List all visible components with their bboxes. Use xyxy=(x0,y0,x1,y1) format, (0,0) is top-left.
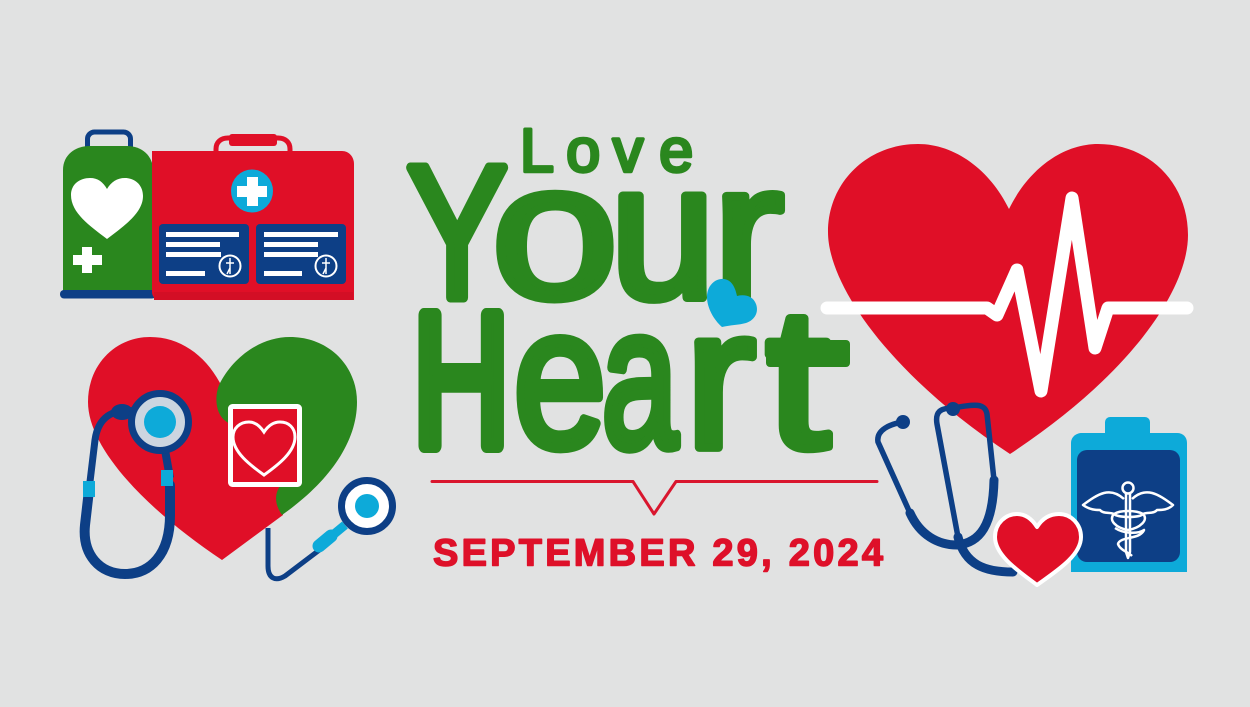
heading: Heart: r xyxy=(685,267,756,490)
heading: Heart: a xyxy=(602,266,678,490)
icon: large red heart xyxy=(828,144,1188,454)
panel: left info card xyxy=(159,224,249,284)
heading: Your xyxy=(407,123,784,339)
icon: heart monitor card xyxy=(230,406,300,484)
icon: green half of heart xyxy=(216,337,357,515)
heading: Love: Love xyxy=(520,116,693,184)
heading: Heart: e xyxy=(514,266,606,490)
icon: red case xyxy=(152,134,354,300)
pulse line xyxy=(827,198,1187,391)
icon: red half of heart xyxy=(88,337,283,560)
icon: two-colour heart with stethoscope xyxy=(83,337,392,579)
heading: Your: r xyxy=(713,125,784,339)
title xyxy=(407,116,850,490)
icon: small red heart xyxy=(995,514,1081,585)
icon: caduceus xyxy=(1083,482,1173,558)
date: SEPTEMBER 29, 2024 xyxy=(433,532,883,574)
icon: left stethoscope xyxy=(83,394,188,574)
heading: Your: o xyxy=(492,123,618,339)
heading: Your: u xyxy=(610,125,715,339)
heading: Heart xyxy=(413,266,850,490)
panel: right info card xyxy=(256,224,346,284)
icon: small blue heart xyxy=(707,279,757,327)
icon: green bag xyxy=(60,132,156,298)
icon: right stethoscope chest piece xyxy=(268,480,392,579)
divider with pointer xyxy=(432,482,877,514)
icon: first aid bags xyxy=(60,132,354,300)
icon: large heart with pulse xyxy=(827,144,1188,454)
icon: lower right stethoscope xyxy=(878,402,1013,572)
icon: clipboard with caduceus xyxy=(1071,417,1187,572)
heading: Heart: H xyxy=(413,275,510,486)
heading: Heart: t xyxy=(766,267,830,490)
heading: Your: Y xyxy=(407,127,508,338)
